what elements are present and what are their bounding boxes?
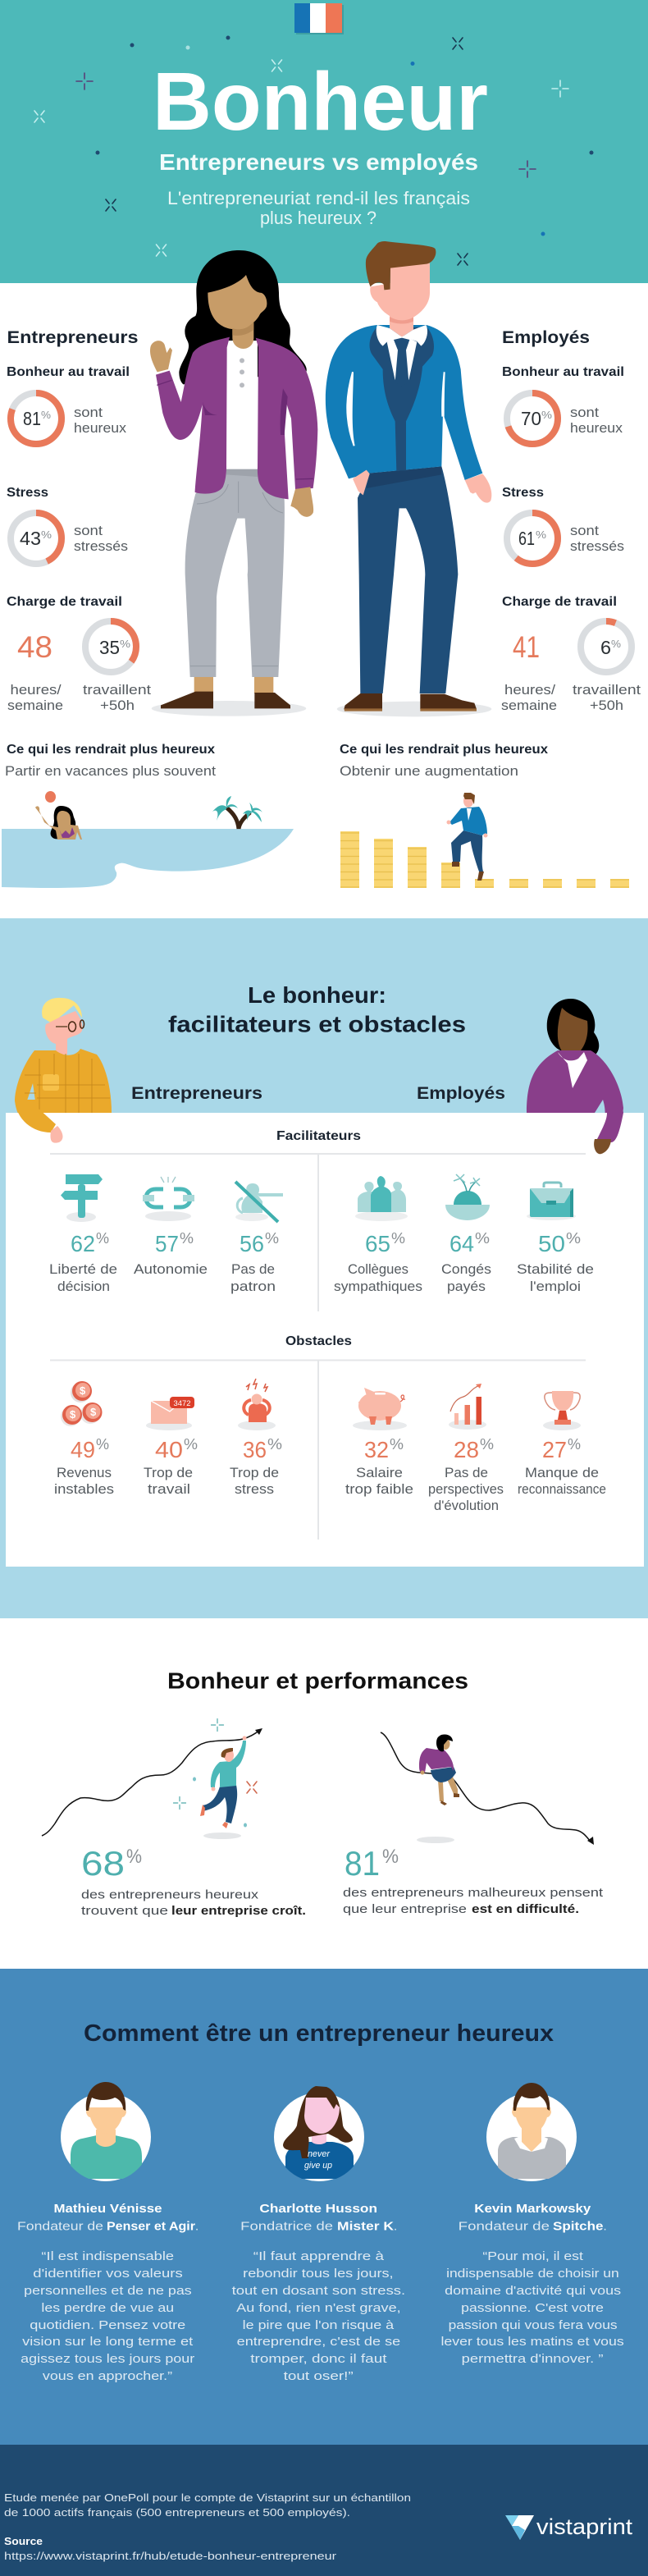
stat: trop de travail 40% xyxy=(144,1436,198,1497)
donut: 81% happy: % xyxy=(41,409,51,421)
stat: collègues sympathiques 65%: sympathiques xyxy=(334,1279,422,1294)
stat: pas de perspectives 28%: % xyxy=(480,1436,494,1453)
panel: hero header xyxy=(0,0,648,283)
illustration: jumping man xyxy=(174,1718,257,1839)
icon: broken chain xyxy=(143,1177,194,1221)
stat: trop de travail 40%: travail xyxy=(148,1481,190,1497)
quote: Mathieu Vénisse: . xyxy=(195,2220,199,2234)
stat: trop de stress 36%: stress xyxy=(235,1481,274,1497)
quote: Charlotte Husson: tout en dosant son stress. xyxy=(232,2284,405,2298)
heading: facilitateurs: Facilitateurs xyxy=(276,1129,361,1143)
stat: stabilité de l'emploi 50%: 50 xyxy=(538,1231,565,1256)
quote: Charlotte Husson: tout oser!” xyxy=(284,2369,354,2383)
stat: 81% in difficulty xyxy=(343,1844,604,1916)
stat: pas de patron 56% xyxy=(230,1230,279,1294)
quote: Kevin Markowsky: passion qui vous fera vous xyxy=(449,2318,618,2332)
stat: revenus instables 49%: Revenus xyxy=(57,1465,112,1480)
quote: Charlotte Husson: rebondir tous les jours, xyxy=(243,2267,394,2281)
stat: trop de travail 40%: 40 xyxy=(155,1437,183,1462)
donut: 81% happy: 81 xyxy=(23,408,41,429)
quote: Kevin Markowsky: . xyxy=(604,2220,607,2234)
intro question xyxy=(167,188,470,228)
donut: 61% stressed: 61 xyxy=(518,528,535,549)
stat: 41 hours per week: 41 xyxy=(513,630,540,664)
white card xyxy=(6,1113,644,1567)
icon: french flag xyxy=(294,3,344,34)
quote: Mathieu Vénisse: “Il est indispensable xyxy=(41,2249,174,2263)
donut: 6% work over 50h: % xyxy=(611,638,621,650)
quote: Mathieu Vénisse: Penser et Agir xyxy=(107,2220,195,2234)
quote: Mathieu Vénisse xyxy=(17,2202,199,2383)
heading: charge de travail: Charge de travail xyxy=(7,595,122,609)
quote: Kevin Markowsky: Spitche xyxy=(553,2220,604,2234)
quote: Charlotte Husson: Charlotte Husson xyxy=(259,2202,377,2216)
stat: trop de travail 40%: % xyxy=(184,1436,198,1453)
stat: 68% growth: des entrepreneurs heureux xyxy=(81,1887,259,1902)
stat: salaire trop faible 32%: trop faible xyxy=(345,1481,413,1497)
column heading: employés: Employés xyxy=(417,1084,505,1103)
label: sont stressés xyxy=(570,523,624,554)
icon: signpost xyxy=(61,1174,103,1222)
quote: Mathieu Vénisse: agissez tous les jours pour xyxy=(21,2352,194,2366)
stat: trop de stress 36% xyxy=(230,1436,282,1497)
icon: no boss xyxy=(235,1182,283,1222)
intro question: plus heureux ? xyxy=(260,208,376,228)
stat: 81% in difficulty: que leur entreprise xyxy=(343,1902,467,1916)
label: sont heureux: sont xyxy=(570,405,599,420)
stat: pas de perspectives 28% xyxy=(428,1436,504,1513)
stat: 48 hours per week: 48 xyxy=(17,630,52,664)
stat: 68% growth xyxy=(81,1844,306,1918)
donut: 81% happy xyxy=(11,393,62,444)
stat: autonomie 57% xyxy=(134,1230,208,1277)
stat: stabilité de l'emploi 50%: l'emploi xyxy=(530,1279,581,1294)
heading: charge de travail: Charge de travail xyxy=(502,595,617,609)
quote: Kevin Markowsky: domaine d'activité qui vous xyxy=(445,2284,621,2298)
label: sont heureux: heureux xyxy=(570,420,623,436)
quote: Mathieu Vénisse: Mathieu Vénisse xyxy=(54,2202,162,2216)
vistaprint logo xyxy=(505,2514,633,2540)
icon: briefcase xyxy=(527,1183,576,1220)
icon: stressed person xyxy=(238,1379,276,1430)
icon: trophy xyxy=(543,1391,581,1430)
text: get a raise: Obtenir une augmentation xyxy=(340,763,518,779)
stat: 81% in difficulty: des entrepreneurs malheureux pensent xyxy=(343,1886,604,1900)
stat: pas de perspectives 28%: perspectives xyxy=(428,1481,504,1497)
stat: revenus instables 49%: 49 xyxy=(71,1437,95,1462)
heading: stress: Stress xyxy=(502,486,544,500)
stat: revenus instables 49%: % xyxy=(96,1436,109,1453)
label: sont stressés xyxy=(74,523,128,554)
quote: Kevin Markowsky: indispensable de choisir un xyxy=(446,2267,619,2281)
stat: pas de patron 56%: Pas de xyxy=(231,1261,275,1277)
heading: employés: Employés xyxy=(502,328,590,347)
donut: 6% work over 50h: +50h xyxy=(590,698,623,713)
quote: Charlotte Husson: entreprendre, c'est de se xyxy=(237,2335,400,2349)
stat: revenus instables 49% xyxy=(54,1436,114,1497)
decorative stars xyxy=(34,36,594,265)
quote: Kevin Markowsky: lever tous les matins et vous xyxy=(441,2335,624,2349)
quote: Kevin Markowsky xyxy=(441,2202,624,2366)
quote: Mathieu Vénisse: vous en approcher.” xyxy=(43,2369,172,2383)
stat: pas de perspectives 28%: d'évolution xyxy=(434,1498,499,1513)
stat: stabilité de l'emploi 50% xyxy=(517,1230,594,1294)
icon: piggy bank xyxy=(353,1388,407,1430)
stat: congés payés 64% xyxy=(441,1230,491,1294)
heading: obstacles: Obstacles xyxy=(285,1334,352,1348)
label: sont stressés: sont xyxy=(74,523,103,538)
stat: 81% in difficulty: 81 xyxy=(345,1844,380,1883)
stat: pas de perspectives 28%: 28 xyxy=(454,1437,479,1462)
icon: coins xyxy=(61,1381,102,1426)
donut: 35% work over 50h: 35 xyxy=(99,637,120,658)
panel: how to be a happy entrepreneur xyxy=(0,1969,648,2445)
stat: autonomie 57%: % xyxy=(180,1230,194,1247)
stat: 41 hours per week: semaine xyxy=(501,698,557,713)
stat: 41 hours per week xyxy=(501,630,557,713)
quote: Mathieu Vénisse: quotidien. Pensez votre xyxy=(30,2318,185,2332)
stat: salaire trop faible 32% xyxy=(345,1436,413,1497)
heading: what would make them happier: Ce qui les rendrait plus heureux xyxy=(340,743,548,757)
donut: 35% work over 50h: % xyxy=(120,638,130,650)
study note: Etude menée par OnePoll pour le compte de Vistaprint sur un échantillon xyxy=(4,2491,411,2504)
quote: Charlotte Husson: tromper, donc il faut xyxy=(250,2352,388,2366)
source: https://www.vistaprint.fr/hub/etude-bonheur-entrepreneur xyxy=(4,2550,337,2562)
quote: Kevin Markowsky: “Pour moi, il est xyxy=(482,2249,584,2263)
donut: 43% stressed: % xyxy=(41,528,52,541)
heading: stress: Stress xyxy=(7,486,48,500)
panel: entrepreneurs stats xyxy=(2,328,294,888)
label: sont stressés: stressés xyxy=(74,538,128,554)
icon: colleagues xyxy=(355,1176,408,1221)
stat: congés payés 64%: Congés xyxy=(441,1261,491,1277)
label: sont stressés: stressés xyxy=(570,538,624,554)
stat: 68% growth: trouvent que xyxy=(81,1904,168,1918)
column heading: entrepreneurs: Entrepreneurs xyxy=(131,1084,262,1103)
stat: pas de perspectives 28%: Pas de xyxy=(445,1465,488,1480)
stat: collègues sympathiques 65%: Collègues xyxy=(348,1261,408,1277)
icon: overflowing email: 3472 xyxy=(174,1399,190,1408)
stat: pas de patron 56%: patron xyxy=(230,1279,276,1294)
icon: island holiday xyxy=(445,1174,490,1220)
portrait: Mathieu xyxy=(61,2082,151,2181)
heading: bonheur au travail: Bonheur au travail xyxy=(502,365,624,379)
heading: what would make them happier: Ce qui les rendrait plus heureux xyxy=(7,743,215,757)
quote: Charlotte Husson: Au fond, rien n'est grave, xyxy=(236,2301,401,2315)
stat: salaire trop faible 32%: 32 xyxy=(364,1437,389,1462)
stat: 48 hours per week: heures/ xyxy=(10,682,62,698)
icon: coins: $ xyxy=(90,1406,97,1418)
heading: bonheur au travail: Bonheur au travail xyxy=(7,365,130,379)
quote: Mathieu Vénisse: personnelles et de ne pas xyxy=(24,2284,192,2298)
portrait: Charlotte: give up xyxy=(304,2161,332,2171)
panel: employees stats xyxy=(340,328,641,888)
intro question: L'entrepreneuriat rend-il les français xyxy=(167,188,470,208)
stat: trop de stress 36%: Trop de xyxy=(230,1465,279,1480)
donut: 35% work over 50h xyxy=(83,621,151,713)
quote: Charlotte Husson: . xyxy=(394,2220,397,2234)
quote: Mathieu Vénisse: Fondateur de xyxy=(17,2220,103,2234)
stat: liberté de décision 62%: Liberté de xyxy=(49,1261,117,1277)
study note xyxy=(4,2491,411,2519)
stat: 81% in difficulty: est en difficulté. xyxy=(472,1902,579,1916)
label: sont stressés: sont xyxy=(570,523,599,538)
portrait: Charlotte: never xyxy=(308,2149,331,2159)
stat: salaire trop faible 32%: Salaire xyxy=(356,1465,403,1480)
quote: Charlotte Husson: Fondatrice de xyxy=(240,2220,333,2234)
quote: Charlotte Husson: le pire que l'on risque à xyxy=(243,2318,395,2332)
stat: 68% growth: % xyxy=(126,1846,142,1868)
stat: collègues sympathiques 65% xyxy=(334,1230,422,1294)
redraw: hands over card xyxy=(15,1100,623,1154)
illustration: coin stairs and man xyxy=(340,793,629,888)
vistaprint logo: vistaprint xyxy=(536,2514,633,2539)
stat: liberté de décision 62%: 62 xyxy=(71,1231,95,1256)
donut: 70% happy: 70 xyxy=(521,408,541,429)
title: Bonheur xyxy=(153,56,488,148)
label: sont heureux: heureux xyxy=(74,420,127,436)
panel: facilitators and obstacles xyxy=(0,918,648,1618)
portrait: Charlotte xyxy=(274,2086,364,2181)
label: sont heureux xyxy=(74,405,127,436)
donut: 43% stressed: 43 xyxy=(20,528,41,549)
source xyxy=(4,2535,337,2562)
label: sont heureux: sont xyxy=(74,405,103,420)
stat: manque de reconnaissance 27%: % xyxy=(568,1436,581,1453)
quote: Mathieu Vénisse: les perdre de vue au xyxy=(41,2301,174,2315)
stat: 68% growth: leur entreprise croît. xyxy=(171,1904,306,1918)
donut: 61% stressed xyxy=(507,513,558,564)
donut: 43% stressed xyxy=(11,513,62,564)
icon: overflowing email xyxy=(146,1397,194,1430)
subtitle: Entrepreneurs vs employés xyxy=(159,149,478,175)
donut: 35% work over 50h: travaillent xyxy=(83,682,151,698)
stat: revenus instables 49%: instables xyxy=(54,1481,114,1497)
quote: Mathieu Vénisse: d'identifier vos valeurs xyxy=(33,2267,183,2281)
quote: Charlotte Husson: Mister K xyxy=(337,2220,394,2234)
donut: 6% work over 50h: 6 xyxy=(600,637,611,658)
donut: 6% work over 50h xyxy=(573,621,641,713)
illustration: woman with purple jacket xyxy=(527,999,623,1154)
illustration: man with plaid shirt xyxy=(15,998,112,1143)
stat: pas de patron 56%: % xyxy=(265,1230,279,1247)
stat: liberté de décision 62%: % xyxy=(96,1230,109,1247)
text: go on holiday more often: Partir en vacances plus souvent xyxy=(5,763,216,779)
stat: manque de reconnaissance 27%: 27 xyxy=(542,1437,567,1462)
stat: 48 hours per week: semaine xyxy=(7,698,63,713)
stat: congés payés 64%: payés xyxy=(447,1279,486,1294)
heading: bonheur et performances: Bonheur et performances xyxy=(167,1668,468,1694)
stat: liberté de décision 62%: décision xyxy=(57,1279,110,1294)
source: Source xyxy=(4,2535,43,2547)
stat: manque de reconnaissance 27% xyxy=(518,1436,606,1497)
icon: rising chart xyxy=(449,1384,486,1430)
donut: 70% happy: % xyxy=(541,409,552,421)
stat: manque de reconnaissance 27%: reconnaissance xyxy=(518,1481,606,1497)
stat: collègues sympathiques 65%: 65 xyxy=(365,1231,390,1256)
stat: salaire trop faible 32%: % xyxy=(390,1436,404,1453)
quote: Charlotte Husson xyxy=(232,2202,405,2383)
chart: falling curve xyxy=(381,1732,594,1845)
stat: congés payés 64%: % xyxy=(475,1230,490,1247)
donut: 6% work over 50h: travaillent xyxy=(573,682,641,698)
donut: 61% stressed: % xyxy=(536,528,546,541)
panel: footer xyxy=(0,2445,648,2576)
stat: trop de stress 36%: 36 xyxy=(243,1437,267,1462)
stat: 68% growth: 68 xyxy=(81,1844,125,1883)
stat: stabilité de l'emploi 50%: Stabilité de xyxy=(517,1261,594,1277)
quote: Kevin Markowsky: Fondateur de xyxy=(459,2220,550,2234)
stat: congés payés 64%: 64 xyxy=(449,1231,474,1256)
stat: autonomie 57%: Autonomie xyxy=(134,1261,208,1277)
heading: le bonheur: facilitateurs et obstacles xyxy=(168,1011,466,1037)
icon: coins: $ xyxy=(70,1408,76,1421)
quote: Mathieu Vénisse: vision sur le long terme et xyxy=(22,2335,194,2349)
heading: entrepreneurs: Entrepreneurs xyxy=(7,328,139,347)
label: sont heureux xyxy=(570,405,623,436)
icon: coins: $ xyxy=(80,1384,86,1397)
heading: le bonheur: Le bonheur: xyxy=(248,982,386,1008)
heading: le bonheur xyxy=(168,982,466,1037)
chart: rising curve xyxy=(42,1728,262,1836)
donut: 70% happy xyxy=(507,393,558,444)
stat: 48 hours per week xyxy=(7,630,63,713)
stat: 41 hours per week: heures/ xyxy=(504,682,555,698)
quote: Kevin Markowsky: passionne. C'est votre xyxy=(461,2301,604,2315)
quote: Charlotte Husson: “Il faut apprendre à xyxy=(253,2249,385,2263)
stat: collègues sympathiques 65%: % xyxy=(391,1230,405,1247)
quote: Kevin Markowsky: permettra d'innover. ” xyxy=(462,2352,604,2366)
stat: trop de stress 36%: % xyxy=(267,1436,282,1453)
stat: 81% in difficulty: % xyxy=(382,1846,399,1868)
stat: stabilité de l'emploi 50%: % xyxy=(566,1230,581,1247)
panel: happiness and performance xyxy=(42,1668,604,1918)
illustration: sitting woman xyxy=(417,1734,459,1843)
stat: autonomie 57%: 57 xyxy=(155,1231,179,1256)
portrait: Kevin xyxy=(486,2083,577,2181)
illustration: beach and swimmer xyxy=(2,791,294,888)
heading: comment être: Comment être un entrepreneur heureux xyxy=(84,2020,554,2047)
stat: trop de travail 40%: Trop de xyxy=(144,1465,193,1480)
quote: Kevin Markowsky: Kevin Markowsky xyxy=(474,2202,591,2216)
stat: manque de reconnaissance 27%: Manque de xyxy=(525,1465,599,1480)
illustration: woman entrepreneur xyxy=(150,250,317,716)
donut: 35% work over 50h: +50h xyxy=(100,698,135,713)
stat: pas de patron 56%: 56 xyxy=(240,1231,264,1256)
study note: de 1000 actifs français (500 entrepreneurs et 500 employés). xyxy=(4,2506,350,2519)
illustration: male employee xyxy=(326,241,491,716)
stat: liberté de décision 62% xyxy=(49,1230,117,1294)
